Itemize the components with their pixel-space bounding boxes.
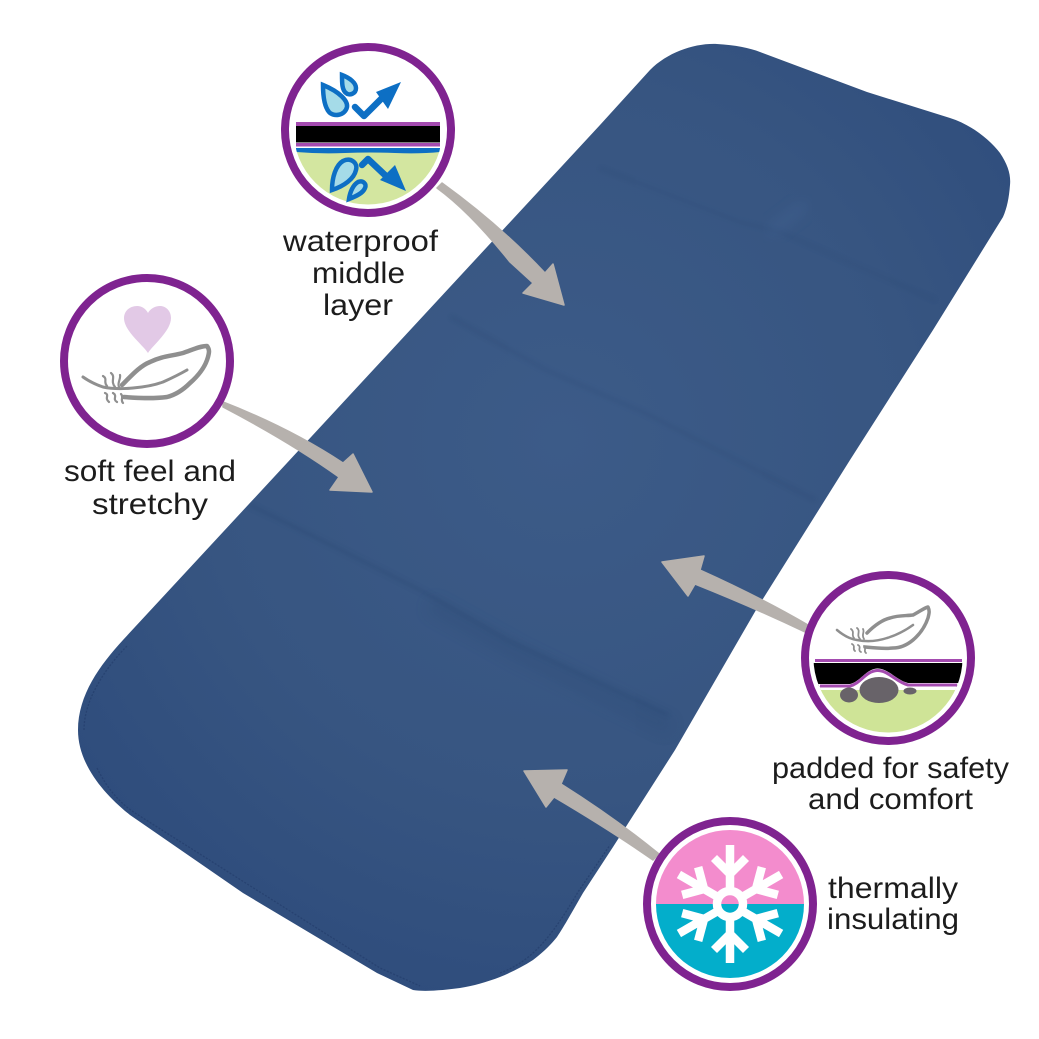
- feather: [837, 607, 929, 653]
- arrows bouncing and passing: [355, 96, 386, 176]
- label: soft feel and stretchy: stretchy: [92, 488, 208, 521]
- feather: [83, 346, 209, 403]
- label: soft feel and stretchy: [64, 455, 236, 521]
- label: padded for safety and comfort: [772, 752, 1009, 816]
- label: soft feel and stretchy: soft feel and: [64, 455, 236, 488]
- label: thermally insulating: [827, 872, 959, 936]
- arrow: soft feel pointer: [223, 402, 372, 492]
- arrow: padded pointer: [662, 556, 808, 632]
- drops: [323, 75, 366, 199]
- icon: waterproof middle layer: [285, 47, 451, 213]
- label: waterproof middle layer: middle: [312, 257, 405, 290]
- arrow: waterproof layer pointer: [437, 183, 564, 305]
- label: padded for safety and comfort: padded for safety: [772, 752, 1009, 785]
- arrow: thermal pointer: [524, 770, 659, 860]
- icon: padded for safety: [805, 575, 971, 748]
- snowflake: [671, 845, 789, 963]
- label: waterproof middle layer: waterproof: [282, 225, 439, 258]
- padding stones: [840, 677, 916, 703]
- label: thermally insulating: insulating: [827, 903, 959, 936]
- label: waterproof middle layer: [282, 225, 439, 322]
- icon: soft feather with heart: [64, 278, 230, 444]
- label: thermally insulating: thermally: [828, 872, 958, 905]
- label: padded for safety and comfort: and comfort: [808, 783, 974, 816]
- icon: thermally insulating snowflake: [647, 821, 813, 987]
- label: waterproof middle layer: layer: [323, 289, 393, 322]
